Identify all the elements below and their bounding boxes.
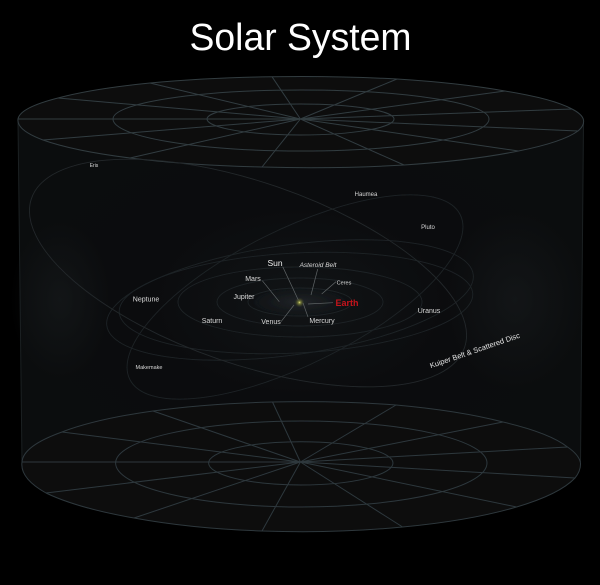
label: Neptune: Neptune [133, 296, 159, 304]
label: Makemake: Makemake [136, 365, 162, 371]
label: Jupiter: Jupiter [233, 294, 255, 301]
sun [294, 298, 304, 308]
title: Solar System [190, 17, 412, 59]
label: Ceres: Ceres [337, 280, 352, 286]
label: Haumea: Haumea [355, 192, 378, 198]
label: Pluto: Pluto [421, 225, 435, 231]
inner planet haze [245, 286, 355, 318]
orbit: Pluto [100, 154, 490, 440]
orbits [2, 112, 494, 440]
label: Earth: Earth [335, 298, 359, 308]
label: Mars: Mars [245, 276, 261, 283]
orbit: asteroid belt [248, 288, 352, 316]
label: Mercury: Mercury [309, 318, 335, 325]
label: Eris: Eris [90, 163, 99, 169]
label: Kuiper Belt & Scattered Disc: Kuiper Belt & Scattered Disc [429, 331, 521, 370]
planet labels [90, 163, 521, 371]
cylinder body [10, 119, 585, 532]
label: Asteroid Belt: Asteroid Belt [299, 262, 338, 269]
leader lines [262, 267, 336, 322]
orbit: Jupiter [217, 278, 383, 326]
label: Venus: Venus [261, 319, 281, 326]
label: Uranus: Uranus [418, 308, 441, 315]
label: Sun: Sun [267, 258, 283, 268]
label: Saturn: Saturn [202, 318, 222, 325]
orbit: Saturn [178, 267, 422, 337]
top disc [18, 76, 584, 168]
orbit: Eris [2, 112, 494, 434]
orbit: Uranus [117, 244, 475, 362]
bottom disc [22, 402, 581, 532]
orbit: Neptune [99, 220, 481, 380]
